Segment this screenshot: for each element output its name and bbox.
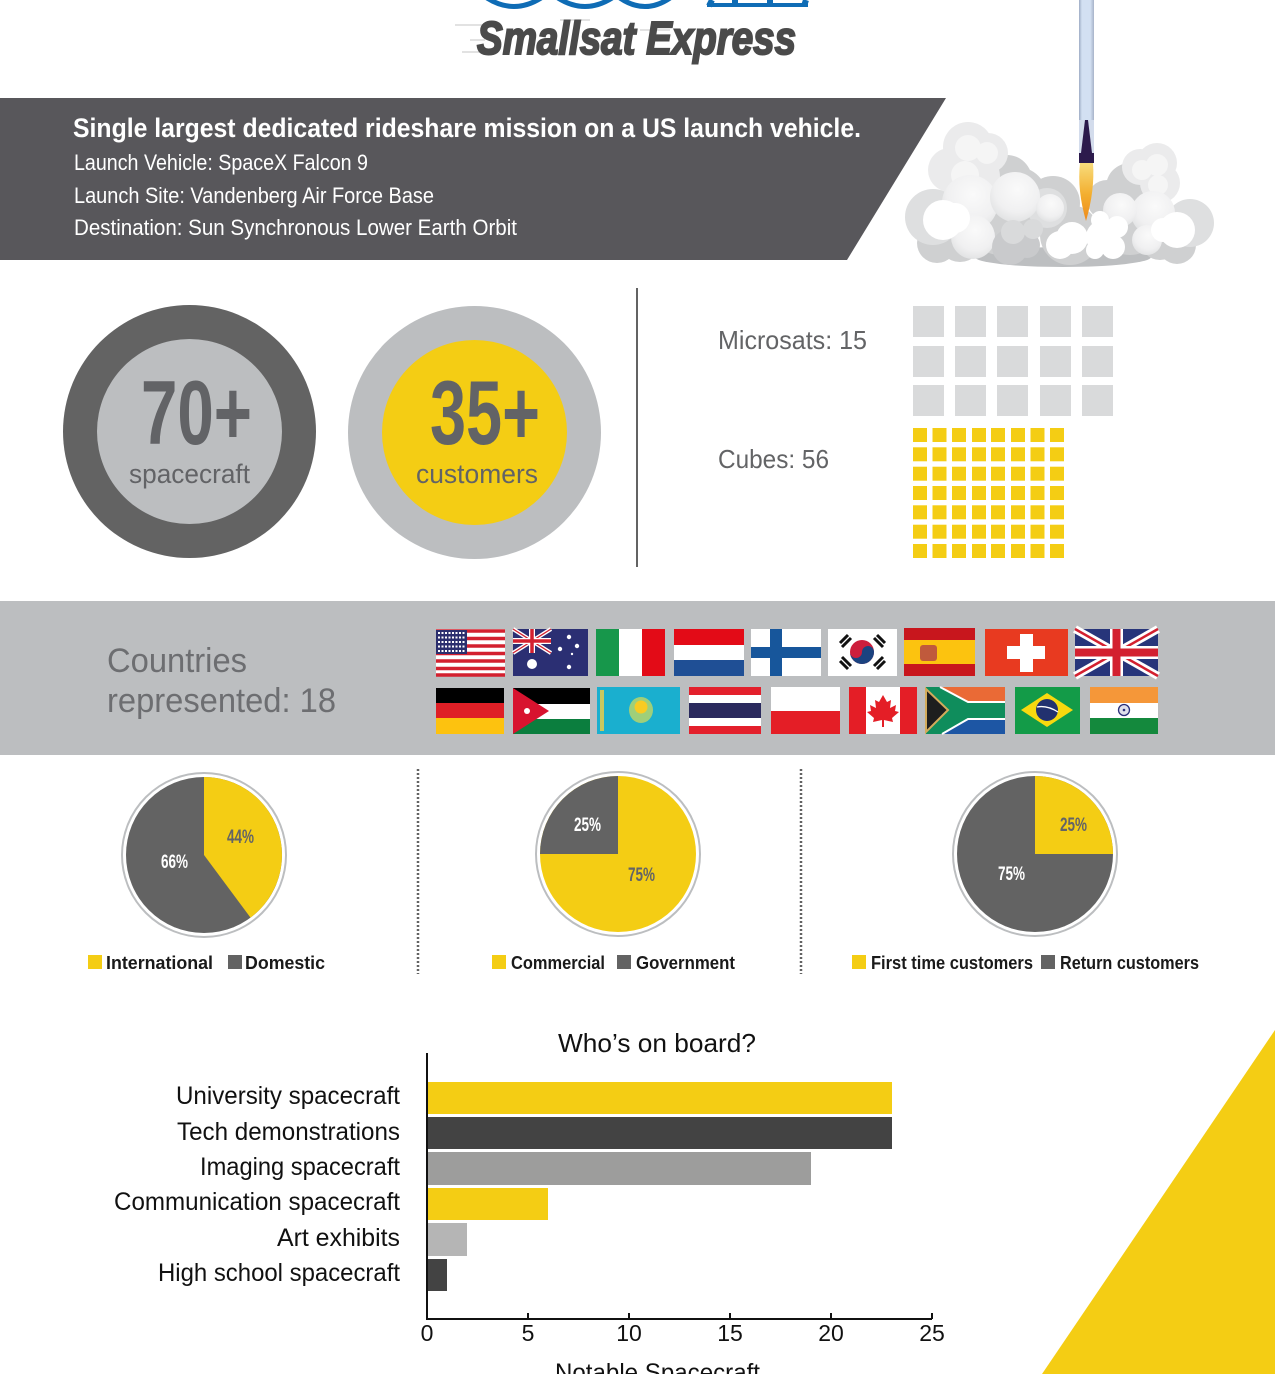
- legend: commercial vs government: Government: [636, 953, 735, 973]
- pie chart: international vs domestic: [122, 773, 286, 937]
- category labels: Imaging spacecraft: [200, 1153, 400, 1181]
- axes: [427, 1053, 932, 1319]
- flag: United States: [436, 629, 505, 676]
- heading: countries represented: represented: 18: [107, 682, 336, 720]
- flag: South Korea: [828, 629, 897, 676]
- banner: mission summary: [0, 98, 946, 260]
- logo wordmark: Smallsat Express: [477, 12, 796, 64]
- flag: Kazakhstan: [597, 687, 680, 734]
- flag: Brazil: [1015, 687, 1080, 734]
- pictogram: 56 cubes: [913, 428, 1064, 558]
- axis tick labels: 25: [919, 1320, 945, 1346]
- flag: South Africa: [926, 687, 1005, 734]
- pie label 25%: 25%: [574, 815, 601, 836]
- legend: international vs domestic: [88, 953, 325, 973]
- bars: [427, 1082, 892, 1291]
- legend: international vs domestic: Domestic: [245, 953, 325, 973]
- pie label 75%: 75%: [628, 865, 655, 886]
- pie label 66%: 66%: [161, 852, 188, 873]
- flag: Poland: [771, 687, 840, 734]
- label: Cubes: Cubes: 56: [718, 444, 829, 474]
- bar chart: who's on board: [114, 1028, 945, 1374]
- category labels: Tech demonstrations: [177, 1118, 400, 1146]
- panel: countries represented: [0, 601, 1275, 755]
- logo mark: cropped blue lettering: [487, 0, 808, 6]
- pie chart: first time vs return customers: [953, 772, 1117, 936]
- flag: Spain: [904, 628, 975, 676]
- banner line: launch vehicle: Launch Vehicle: SpaceX Falcon 9: [74, 150, 368, 175]
- stat number 70+: 70+: [141, 363, 252, 464]
- label: Microsats: Microsats: 15: [718, 325, 867, 355]
- rocket engine section: [1079, 120, 1094, 163]
- category labels: [114, 1082, 400, 1287]
- legend: first time vs return customers: First time customers: [871, 953, 1033, 973]
- category labels: Art exhibits: [277, 1224, 400, 1252]
- flag: Netherlands: [674, 629, 744, 676]
- heading: countries represented: Countries: [107, 642, 247, 680]
- flag: Finland: [751, 629, 821, 676]
- flag: Germany: [436, 688, 504, 734]
- banner line: launch site: Launch Site: Vandenberg Air Force Base: [74, 183, 434, 208]
- pictogram: 15 microsats: [913, 306, 1113, 416]
- stat circle: 70+ spacecraft: [63, 305, 316, 558]
- flag: Thailand: [689, 687, 761, 734]
- legend: commercial vs government: Commercial: [511, 953, 605, 973]
- logo speed streaks: [455, 20, 670, 52]
- flag: India: [1090, 687, 1158, 734]
- category labels: High school spacecraft: [158, 1259, 400, 1287]
- stat label spacecraft: spacecraft: [129, 459, 250, 489]
- category labels: Communication spacecraft: [114, 1188, 400, 1216]
- banner heading: Single largest dedicated rideshare mission on a US launch vehicle.: [73, 113, 861, 143]
- axis tick labels: 20: [818, 1320, 844, 1346]
- logo: Smallsat Express: [455, 0, 808, 64]
- legend: commercial vs government: [492, 953, 735, 973]
- chart title: Who’s on board?: [558, 1028, 756, 1058]
- banner line: destination: Destination: Sun Synchronous Lower Earth Orbit: [74, 215, 517, 240]
- stat number 35+: 35+: [430, 363, 540, 464]
- axis tick labels: 0: [421, 1320, 433, 1346]
- pie label 25%: 25%: [1060, 815, 1087, 836]
- stat label customers: customers: [416, 459, 538, 489]
- legend: first time vs return customers: Return customers: [1060, 953, 1199, 973]
- stat circle: 35+ customers: [348, 306, 601, 559]
- flag: Switzerland: [985, 629, 1068, 676]
- heading: countries represented: [107, 642, 336, 720]
- icon: rocket launch with smoke cloud: [905, 0, 1214, 267]
- category labels: University spacecraft: [176, 1082, 400, 1110]
- pie chart: commercial vs government: [536, 772, 700, 936]
- axis tick labels: 15: [717, 1320, 743, 1346]
- decorative corner: yellow triangle: [1042, 1030, 1275, 1374]
- pie label 44%: 44%: [227, 827, 254, 848]
- flag: Italy: [596, 629, 665, 676]
- flag: Jordan: [513, 688, 590, 734]
- axis tick labels: [421, 1320, 945, 1346]
- rocket body: [1079, 0, 1094, 122]
- rocket flame: [1079, 163, 1093, 221]
- flag: Canada: [849, 687, 917, 734]
- pie label 75%: 75%: [998, 864, 1025, 885]
- axis tick labels: 10: [616, 1320, 642, 1346]
- flag: Australia: [513, 629, 588, 676]
- smoke cloud: [905, 122, 1214, 267]
- flag: United Kingdom: [1075, 629, 1158, 676]
- legend: international vs domestic: International: [106, 953, 213, 973]
- legend: first time vs return customers: [852, 953, 1199, 973]
- axis tick labels: 5: [522, 1320, 534, 1346]
